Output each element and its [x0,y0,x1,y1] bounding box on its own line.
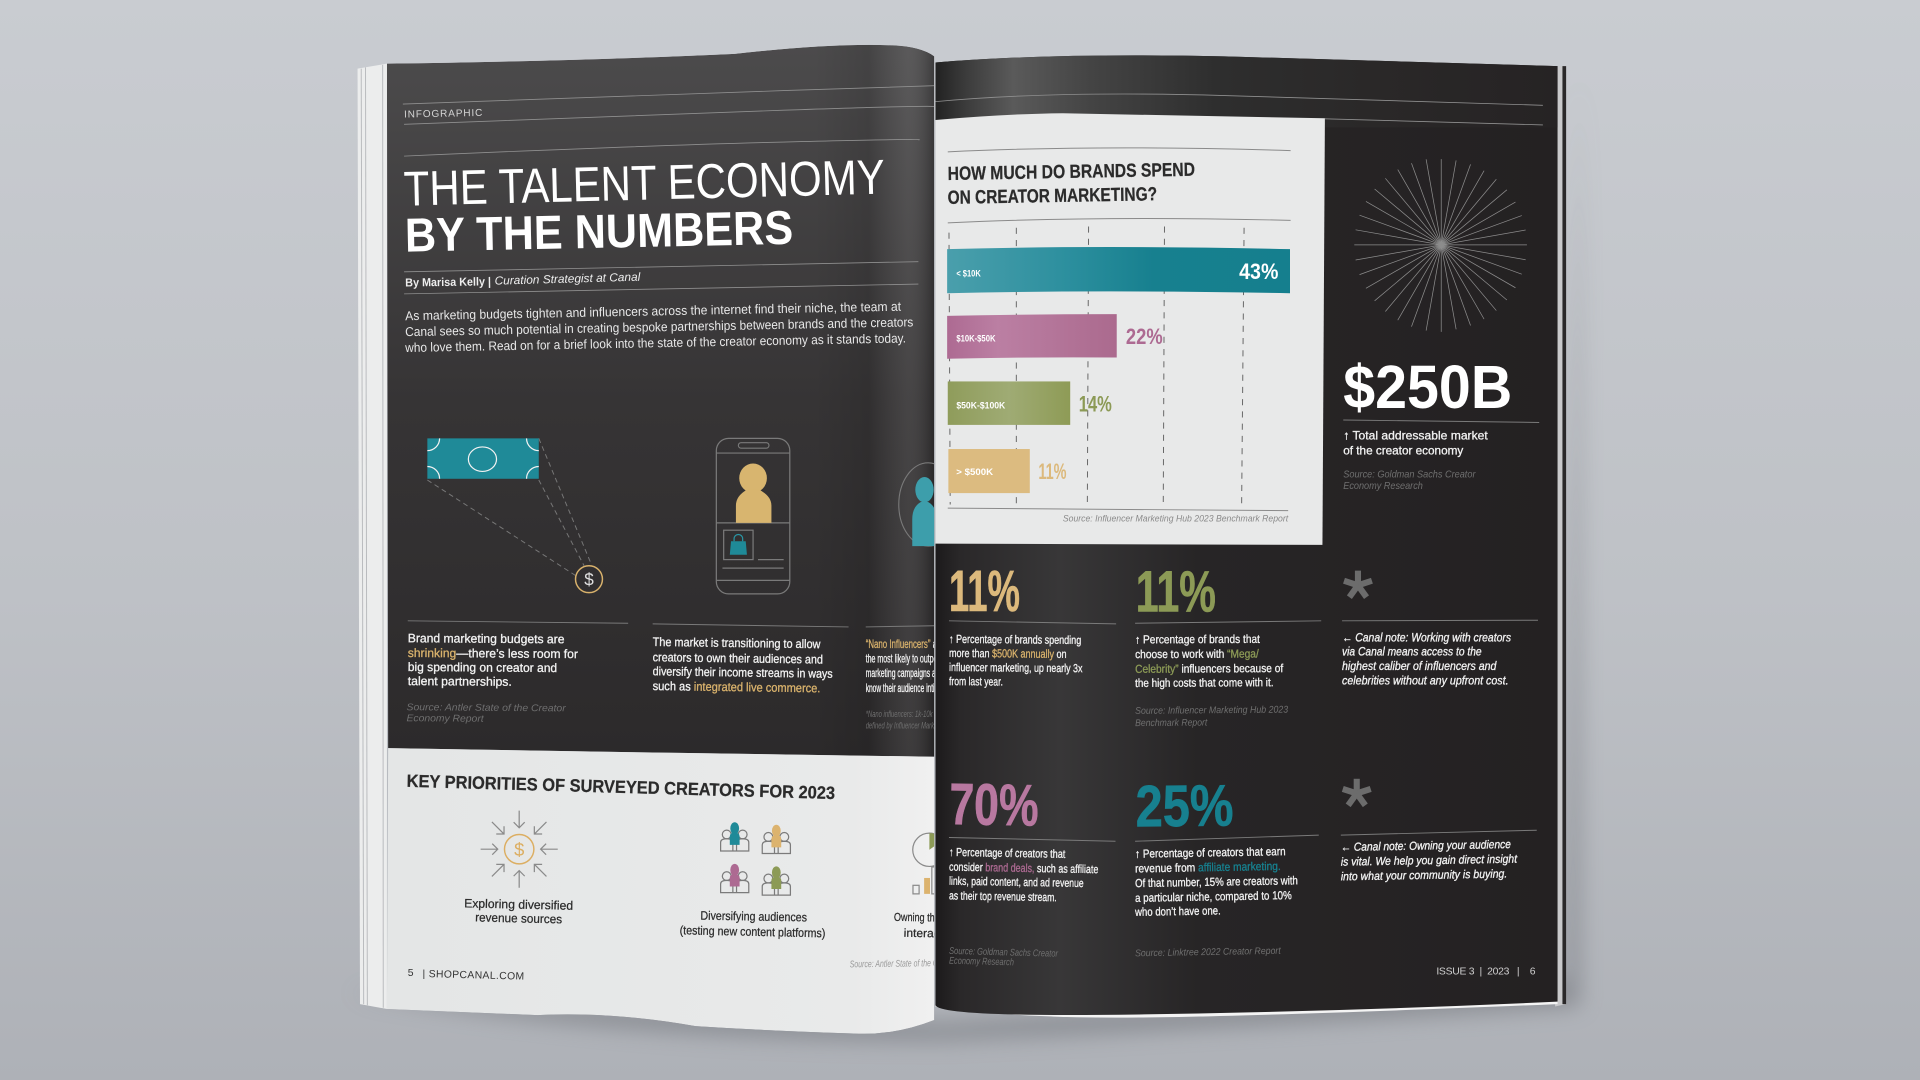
label: diversified revenue: revenue sources [475,910,562,926]
stat: 11 percent mega celebrity: Celebrity” influencers because of [1135,662,1284,676]
footer: page five: SHOPCANAL.COM [428,969,524,983]
byline [406,272,640,289]
top rules [936,94,1543,125]
stat: 25 percent affiliate: ↑ Percentage of creators that earn [1135,845,1286,861]
note: owning your audience: into what your community is buying. [1341,868,1507,883]
byline: By Marisa Kelly | [405,275,491,290]
intro text: Canal sees so much potential in creating bespoke partnerships between brands and the creators [405,314,913,339]
note: working with creators: via Canal means access to the [1342,646,1482,659]
coin: $ [584,569,594,589]
note: working with creators: celebrities without any upfront cost. [1342,674,1509,687]
right page top band [936,55,1558,127]
bar: 50K to 100K [948,381,1112,425]
stat: 250B: Source: Goldman Sachs Creator [1343,470,1476,481]
bar: over 500K [948,449,1067,493]
bar: 50K to 100K: $50K-$100K [956,400,1006,410]
stat: 11 percent mega celebrity: choose to work with “Mega/ [1135,648,1259,661]
text: market column: diversify their income streams in ways [653,664,833,681]
note: working with creators: ← Canal note: Working with creators [1342,632,1511,645]
heading: key priorities: KEY PRIORITIES OF SURVEYED CREATORS FOR 2023 [406,771,835,803]
footer: page five: 5 [408,968,414,979]
text: market column: The market is transitioning to allow [653,635,821,651]
note: owning your audience [1341,779,1537,883]
stat: 11 percent mega celebrity: Benchmark Report [1135,717,1209,729]
note: owning your audience: is vital. We help you gain direct insight [1341,853,1518,869]
text: nano influencers column: marketing campaigns as they [866,667,954,680]
icon: audience groups [721,822,790,895]
stat: 11 percent annual spend [949,559,1116,689]
stat: 250B: ↑ Total addressable market [1343,429,1488,443]
icon: starburst [1354,159,1527,332]
stat: 25 percent affiliate: Source: Linktree 2022 Creator Report [1135,946,1282,959]
product frame [724,530,753,560]
chart title: HOW MUCH DO BRANDS SPEND [947,160,1195,185]
chart title: ON CREATOR MARKETING? [947,184,1157,209]
text: nano influencers column: know their audience intimately [866,682,954,695]
header rules [403,86,934,294]
stat: 11 percent annual spend: ↑ Percentage of brands spending [949,633,1081,647]
icon: asterisk [1343,779,1371,805]
person [736,463,771,523]
label: owning interactions: Owning their customer [894,911,985,925]
icon: owning interactions [913,833,946,894]
group teal [721,822,749,851]
stat: 11 percent annual spend: from last year. [949,675,1003,689]
stat: 70 percent brand deals: links, paid content, and ad revenue [949,875,1084,890]
bar: under 10K: 43% [1239,259,1279,284]
stat: 70 percent brand deals: ↑ Percentage of creators that [949,846,1066,861]
stat: 250B [1343,353,1539,492]
footer: page five: | [422,969,425,980]
stat: 25 percent affiliate: 25% [1135,774,1234,840]
panel: chart [936,113,1325,545]
text: nano influencers column: *Nano influencers: 1k-10k followers, [866,709,959,719]
text: market column: creators to own their audiences and [653,650,823,667]
group green [762,866,790,895]
stat: 70 percent brand deals: Economy Research [949,956,1014,968]
banknote [427,438,539,479]
left page dark area [387,45,934,757]
stat: 70 percent brand deals [949,772,1116,968]
stat: 11 percent annual spend: 11% [949,559,1020,624]
stat: 25 percent affiliate: who don’t have one. [1134,904,1221,919]
title: THE TALENT ECONOMY [403,151,885,217]
stat: 11 percent annual spend: influencer marketing, up nearly 3x [949,661,1083,675]
text: budgets column: shrinking—there’s less room for [408,646,578,661]
panel: left page edge stack [358,64,387,1009]
text: market column [653,624,849,695]
chart source: Source: Influencer Marketing Hub 2023 Benchmark Report [1063,514,1288,525]
label: diversified revenue: Exploring diversified [464,896,573,913]
stat: 250B: Economy Research [1343,481,1423,492]
icon: diversified revenue [481,811,558,888]
book shadow [349,73,1580,1041]
intro text [405,302,913,352]
icon: phone [716,438,790,594]
text: budgets column: Source: Antler State of the Creator [407,702,567,714]
bar: 10K to 50K [947,314,1163,359]
group tan [762,825,790,853]
left page gutter shading [888,46,934,756]
stat: 11 percent mega celebrity: 11% [1136,560,1216,625]
stat: 70 percent brand deals: as their top revenue stream. [949,889,1057,904]
icon: shrinking money [427,438,602,593]
stat: 25 percent affiliate: revenue from affiliate marketing. [1135,860,1281,875]
text: nano influencers column [866,626,959,731]
group pink [721,864,749,893]
byline: Curation Strategist at Canal [494,271,641,288]
stat: 11 percent annual spend: more than $500K annually on [949,647,1067,661]
chart title [948,162,1194,204]
text: nano influencers column: “Nano Influencers” are [866,638,944,651]
text: budgets column: talent partnerships. [408,674,512,689]
panel: left page [387,45,988,1034]
stat: 11 percent mega celebrity: the high costs that come with it. [1135,676,1273,690]
label: diversifying audiences [680,909,826,940]
stat: 70 percent brand deals: Source: Goldman Sachs Creator [949,946,1059,960]
source: priorities: Source: Antler State of the Creator Economy [850,957,988,970]
label: diversifying audiences: Diversifying audiences [700,909,807,924]
bar: 10K to 50K: 22% [1126,324,1163,349]
bar: under 10K: < $10K [956,269,981,279]
bar: over 500K: 11% [1038,459,1067,484]
label: diversifying audiences: (testing new content platforms) [680,923,826,940]
label: owning interactions: interactions [904,927,965,941]
footer: issue: ISSUE 3 | 2023 | 6 [1436,967,1536,978]
text: nano influencers column: the most likely to outperform [866,652,954,665]
title: BY THE NUMBERS [404,202,794,263]
right page white bottom edge [936,1002,1558,1018]
intro text: who love them. Read on for a brief look into the state of the creator economy as it stands today. [404,330,906,355]
stat: 11 percent mega celebrity: ↑ Percentage of brands that [1135,633,1261,646]
chart gridlines [949,227,1244,504]
label: owning interactions [894,911,985,941]
text: nano influencers column: defined by Influencer Marketing Hub [866,721,959,731]
stat: 70 percent brand deals: 70% [949,772,1039,839]
text: market column: such as integrated live commerce. [653,679,821,695]
icon: diversified revenue: $ [514,839,524,860]
label: infographic: INFOGRAPHIC [404,108,482,121]
right page base [935,55,1558,1015]
bar: 50K to 100K: 14% [1079,391,1112,416]
panel: right page [935,55,1566,1018]
chart rules [948,148,1291,511]
text: budgets column [407,621,628,725]
stat: 25 percent affiliate: Of that number, 15% are creators with [1135,874,1298,890]
coin [576,566,602,593]
text: budgets column: big spending on creator and [408,660,557,675]
note: working with creators [1342,571,1538,687]
stat: 250B: of the creator economy [1343,443,1464,457]
note: owning your audience: ← Canal note: Owning your audience [1341,838,1512,854]
icon: asterisk [1344,571,1372,597]
bar: over 500K: > $500K [956,467,993,477]
converging arrows [481,811,558,888]
left page light area [387,748,934,1034]
text: budgets column: Economy Report [407,713,485,725]
stat: 250B: $250B [1343,353,1512,421]
text: budgets column: Brand marketing budgets are [408,631,565,646]
note: working with creators: highest caliber of influencers and [1342,660,1497,673]
stat: 11 percent mega celebrity [1135,560,1321,729]
label: diversified revenue [464,896,573,926]
stat: 11 percent mega celebrity: Source: Influencer Marketing Hub 2023 [1135,705,1289,717]
right page edge stack [1555,275,1566,1006]
icon: nano influencer [899,463,958,546]
stat: 25 percent affiliate: a particular niche, compared to 10% [1135,889,1292,905]
stat: 25 percent affiliate [1134,774,1319,959]
title [404,160,884,252]
intro text: As marketing budgets tighten and influencers across the internet find their niche, the team at [405,299,902,323]
bar: 10K to 50K: $10K-$50K [956,334,996,344]
bar: under 10K [947,247,1290,293]
stat: 70 percent brand deals: consider brand deals, such as affiliate [949,861,1099,876]
